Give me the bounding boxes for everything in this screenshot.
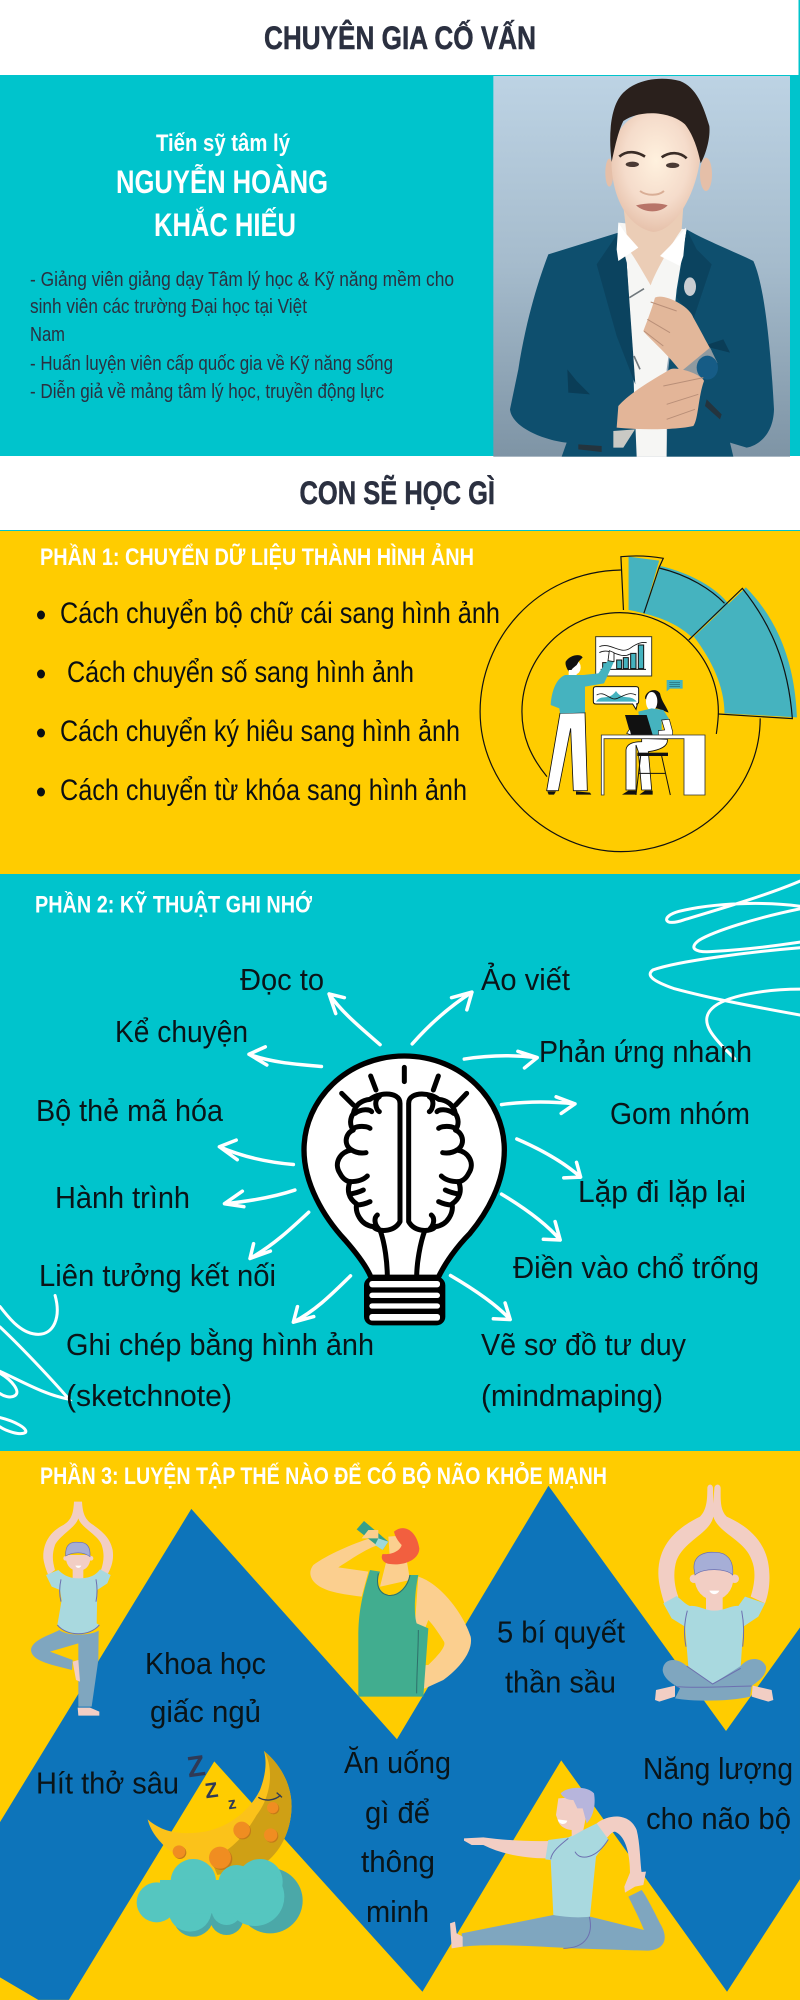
panel: part 2 bbox=[0, 874, 800, 1451]
memory technique labels bbox=[36, 962, 759, 1413]
part 1 bullet list: Cách chuyển bộ chữ cái sang hình ảnh bbox=[60, 597, 500, 630]
advisor biography: Nam bbox=[30, 324, 65, 346]
standing man bbox=[547, 651, 614, 795]
memory technique labels: Phản ứng nhanh bbox=[539, 1034, 752, 1069]
illustration: two people presenting data bbox=[547, 637, 705, 795]
advisor name: NGUYỄN HOÀNG bbox=[116, 164, 328, 200]
memory technique labels: Hành trình bbox=[55, 1180, 190, 1215]
illustration: sleeping crescent moon and cloud: Z bbox=[185, 1749, 207, 1784]
healthy brain practice labels: minh bbox=[366, 1894, 429, 1929]
header: advisor heading: CHUYÊN GIA CỐ VẤN bbox=[264, 20, 536, 56]
healthy brain practice labels: 5 bí quyết bbox=[497, 1614, 625, 1650]
advisor degree: Tiến sỹ tâm lý bbox=[156, 130, 291, 157]
illustration: stretching figure bbox=[450, 1788, 665, 1951]
memory technique labels: Kể chuyện bbox=[115, 1014, 248, 1049]
part 2 heading: PHẦN 2: KỸ THUẬT GHI NHỚ bbox=[35, 890, 312, 918]
part 1 bullet list: Cách chuyển từ khóa sang hình ảnh bbox=[60, 774, 467, 807]
icon: light bulb with brain bbox=[304, 1056, 504, 1325]
healthy brain practice labels: giấc ngủ bbox=[150, 1694, 261, 1729]
illustration: seated yoga figure bbox=[655, 1485, 773, 1702]
healthy brain practice labels bbox=[36, 1614, 793, 1929]
healthy brain practice labels: gì để bbox=[365, 1795, 430, 1830]
panel: part 1 bbox=[0, 530, 800, 874]
illustration: man drinking water bbox=[310, 1521, 471, 1697]
healthy brain practice labels: thông bbox=[361, 1844, 435, 1879]
part 1 heading: PHẦN 1: CHUYỂN DỮ LIỆU THÀNH HÌNH ẢNH bbox=[40, 542, 474, 571]
panel: advisor profile bbox=[0, 75, 800, 457]
speech bubble bbox=[593, 687, 639, 709]
healthy brain practice labels: Ăn uống bbox=[344, 1745, 451, 1780]
advisor name: KHẮC HIẾU bbox=[154, 207, 296, 243]
advisor biography: - Diễn giả về mảng tâm lý học, truyền động lực bbox=[30, 380, 384, 403]
advisor portrait bbox=[493, 76, 790, 457]
seated woman at desk bbox=[601, 690, 705, 795]
healthy brain practice labels: Khoa học bbox=[145, 1646, 266, 1681]
part 1 bullet list: Cách chuyển ký hiêu sang hình ảnh bbox=[60, 715, 460, 748]
healthy brain practice labels: thần sầu bbox=[505, 1664, 616, 1700]
heading: what the child learns: CON SẼ HỌC GÌ bbox=[300, 475, 495, 511]
memory technique labels: Ghi chép bằng hình ảnh bbox=[66, 1327, 374, 1362]
small comment icon bbox=[667, 680, 683, 691]
advisor biography: - Huấn luyện viên cấp quốc gia về Kỹ năng sống bbox=[30, 353, 393, 375]
illustration: sleeping crescent moon and cloud bbox=[137, 1749, 303, 1937]
memory technique labels: Đọc to bbox=[240, 962, 324, 997]
hand-drawn arrows bbox=[219, 992, 581, 1322]
healthy brain practice labels: cho não bộ bbox=[646, 1801, 791, 1836]
memory technique labels: Gom nhóm bbox=[610, 1096, 750, 1131]
memory technique labels: Liên tưởng kết nối bbox=[39, 1258, 276, 1293]
illustration: sleeping crescent moon and cloud: z bbox=[227, 1793, 237, 1813]
healthy brain practice labels: Hít thở sâu bbox=[36, 1766, 179, 1800]
illustration: sleeping crescent moon and cloud: Z bbox=[203, 1778, 220, 1803]
advisor biography: - Giảng viên giảng dạy Tâm lý học & Kỹ năng mềm cho bbox=[30, 269, 454, 291]
decorative scribbles bbox=[0, 881, 800, 1434]
illustration: concentric circles and teal wedges bbox=[480, 556, 797, 852]
advisor biography: sinh viên các trường Đại học tại Việt bbox=[30, 296, 307, 318]
memory technique labels: (mindmaping) bbox=[481, 1378, 663, 1413]
part 3 heading: PHẦN 3: LUYỆN TẬP THẾ NÀO ĐỂ CÓ BỘ NÃO KHỎE MẠNH bbox=[40, 1461, 607, 1490]
advisor name bbox=[116, 164, 328, 243]
panel: part 3 bbox=[0, 1451, 800, 2000]
memory technique labels: (sketchnote) bbox=[66, 1378, 232, 1413]
part 1 bullet list: Cách chuyển số sang hình ảnh bbox=[67, 656, 414, 689]
memory technique labels: Bộ thẻ mã hóa bbox=[36, 1093, 224, 1128]
part 1 bullet list bbox=[37, 597, 500, 807]
memory technique labels: Ảo viết bbox=[481, 962, 570, 997]
memory technique labels: Vẽ sơ đồ tư duy bbox=[481, 1327, 686, 1362]
advisor biography bbox=[30, 269, 454, 403]
zigzag blue mountains bbox=[0, 1486, 800, 2000]
whiteboard chart bbox=[596, 637, 652, 676]
memory technique labels: Điền vào chổ trống bbox=[513, 1250, 759, 1285]
illustration: tree pose yoga figure bbox=[31, 1502, 113, 1716]
memory technique labels: Lặp đi lặp lại bbox=[578, 1174, 746, 1209]
